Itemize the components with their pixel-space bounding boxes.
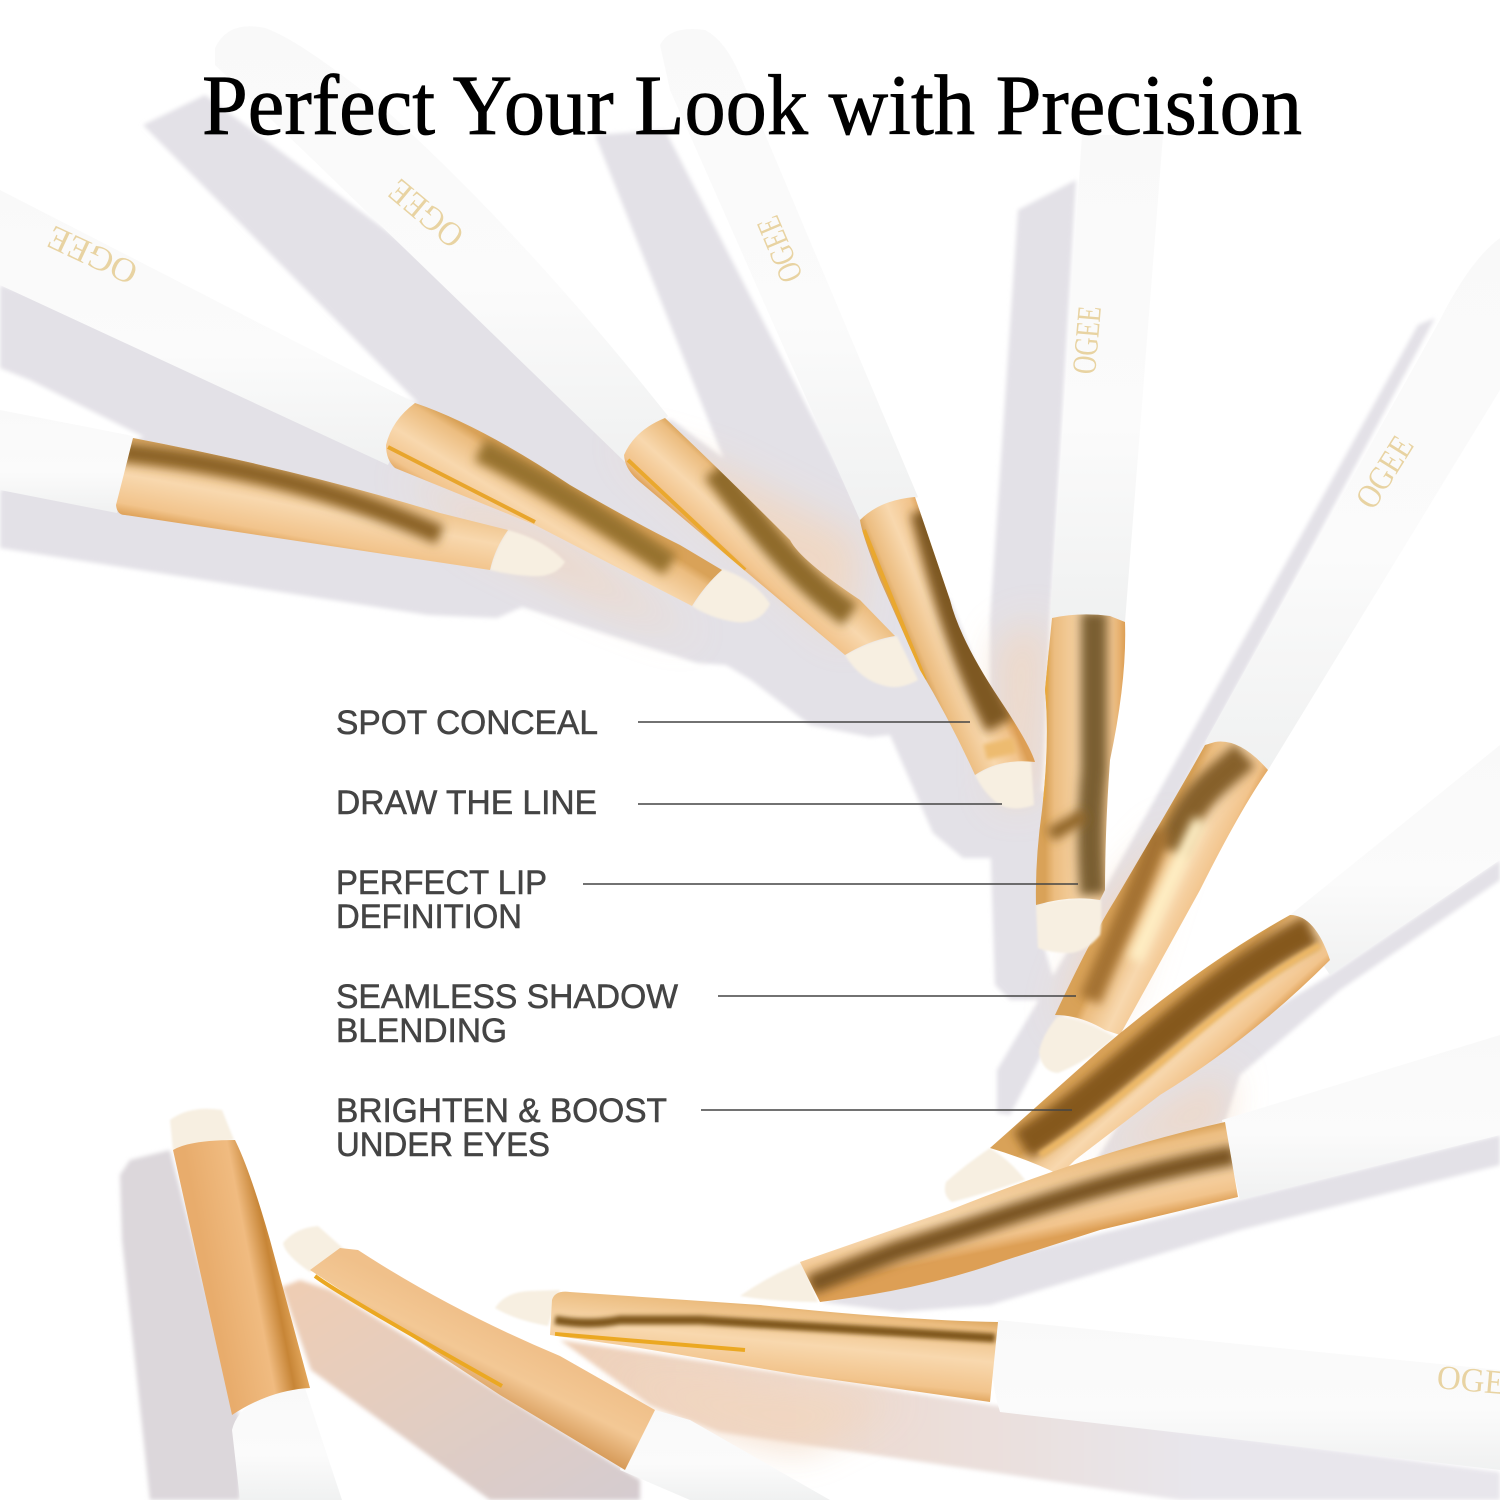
ferrule [1055,742,1268,1035]
logo: OGEE [381,171,471,255]
ferrule [860,497,1035,775]
ferrule [310,1248,655,1470]
bristles [945,1148,1025,1202]
callout: seamless shadow blending: SEAMLESS SHADOW [336,978,678,1016]
ferrule [990,915,1330,1175]
warm reflections around ferrules [400,440,1230,1450]
ferrule [173,1140,310,1415]
callout: perfect lip definition: PERFECT LIP [336,864,547,902]
handle [1205,238,1500,770]
handle [1050,135,1163,622]
callout: brighten and boost under eyes: UNDER EYES [336,1126,550,1164]
brush 10 [283,1226,830,1500]
brush 4 [660,29,1035,808]
brush 8 [740,1035,1500,1302]
logo: OGEE [1066,305,1109,376]
handle [992,1320,1500,1470]
bristles [692,569,770,622]
callout: brighten and boost under eyes [336,1092,1072,1164]
bristles [490,530,565,576]
callout: seamless shadow blending: BLENDING [336,1012,507,1050]
handle [660,29,918,520]
logo: OGEE [42,218,143,291]
title: Perfect Your Look with Precision [202,57,1302,153]
brush 11 [170,1109,342,1500]
callout: perfect lip definition: DEFINITION [336,898,522,936]
handle [0,190,415,465]
bristles [495,1290,560,1326]
brush 2 [0,190,770,622]
callout: spot conceal: SPOT CONCEAL [336,704,598,742]
logo: OGEE [750,211,811,288]
bristles [740,1262,818,1302]
ferrule [1036,612,1125,905]
brush 9 [495,1290,1500,1470]
ferrule [800,1122,1238,1302]
bristles [283,1226,345,1272]
handle [0,410,133,513]
callout: brighten and boost under eyes: BRIGHTEN & BOOST [336,1092,667,1130]
logo: OGEE [1349,430,1421,515]
handle [1222,1035,1500,1200]
ferrule [116,438,508,570]
brush 7 [945,745,1500,1202]
brush 5 [1036,135,1163,953]
ferrule [386,403,722,606]
handle [232,1388,342,1500]
handle [215,26,668,462]
handle [1290,745,1500,975]
ferrule [624,418,895,655]
brush 3 [215,26,918,687]
brush 6 [1039,238,1500,1073]
ferrule [550,1292,998,1402]
bristles [1036,898,1101,953]
callout: seamless shadow blending [336,978,1076,1050]
bristles [1039,1016,1115,1073]
callout: draw the line: DRAW THE LINE [336,784,597,822]
brush 1 [0,410,565,576]
bristles [170,1109,234,1150]
callout: perfect lip definition [336,864,1078,936]
bristles [845,636,918,687]
handle [620,1410,830,1500]
bristles [975,760,1034,808]
